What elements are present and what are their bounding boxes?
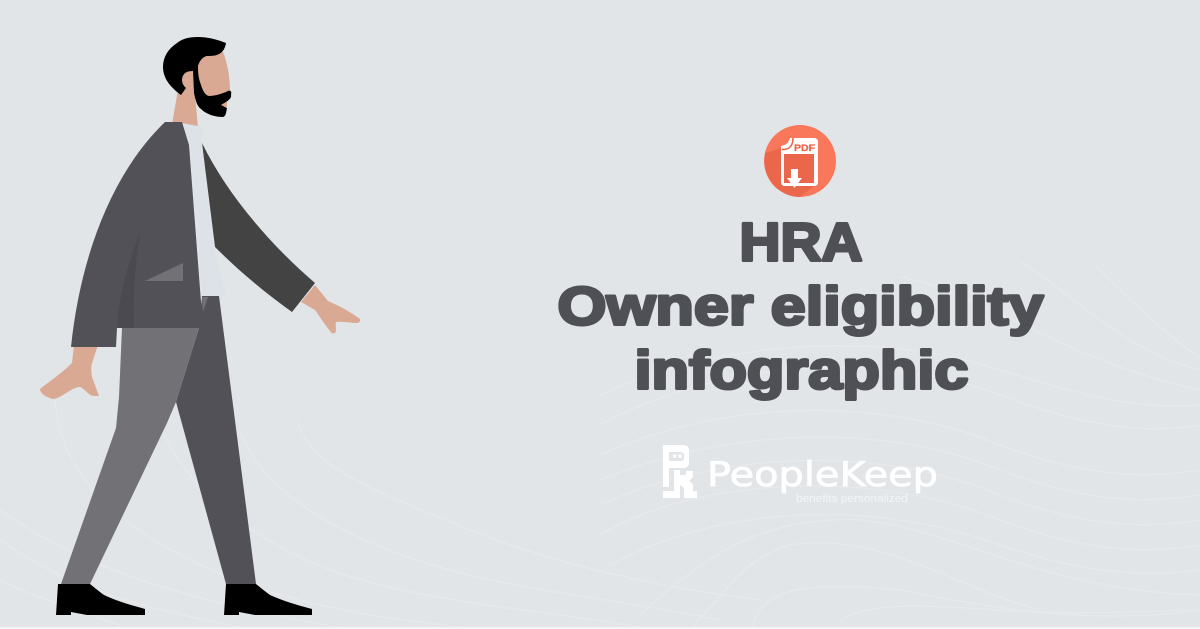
hair (163, 37, 226, 95)
jacket pocket (145, 263, 183, 281)
logo tagline: benefits personalized (796, 493, 908, 505)
title: HRA (740, 212, 862, 272)
logo mark head and stem (663, 445, 689, 487)
title: infographic (634, 340, 968, 400)
face (196, 52, 230, 107)
near trouser leg (61, 328, 199, 584)
left hand (40, 345, 99, 399)
download arrow (787, 169, 802, 188)
title (558, 212, 1044, 400)
PDF label: PDF (794, 143, 815, 154)
shirt-trouser notch (202, 297, 208, 312)
beard (193, 65, 231, 117)
logo wordmark: PeopleKeep (707, 455, 938, 495)
logo eye right (678, 454, 682, 458)
shirt (182, 123, 226, 296)
far arm sleeve (202, 143, 315, 312)
logo mark K (663, 470, 697, 498)
illustration: walking businessman (40, 37, 360, 615)
PeopleKeep logo (663, 445, 938, 505)
right hand (301, 285, 360, 333)
far trouser leg (176, 296, 256, 584)
folded corner (782, 138, 793, 150)
right shoe (224, 584, 312, 615)
icon circle (764, 125, 836, 197)
icon long shadow (765, 148, 818, 197)
icon: PDF download (764, 125, 836, 197)
left shoe (56, 584, 145, 615)
logo eye left (673, 454, 676, 458)
jacket (71, 122, 203, 347)
jacket fold (117, 233, 140, 328)
title: Owner eligibility (558, 276, 1044, 336)
document panel (784, 154, 814, 183)
document page (781, 138, 818, 186)
ear (180, 74, 194, 86)
neck (172, 70, 198, 128)
